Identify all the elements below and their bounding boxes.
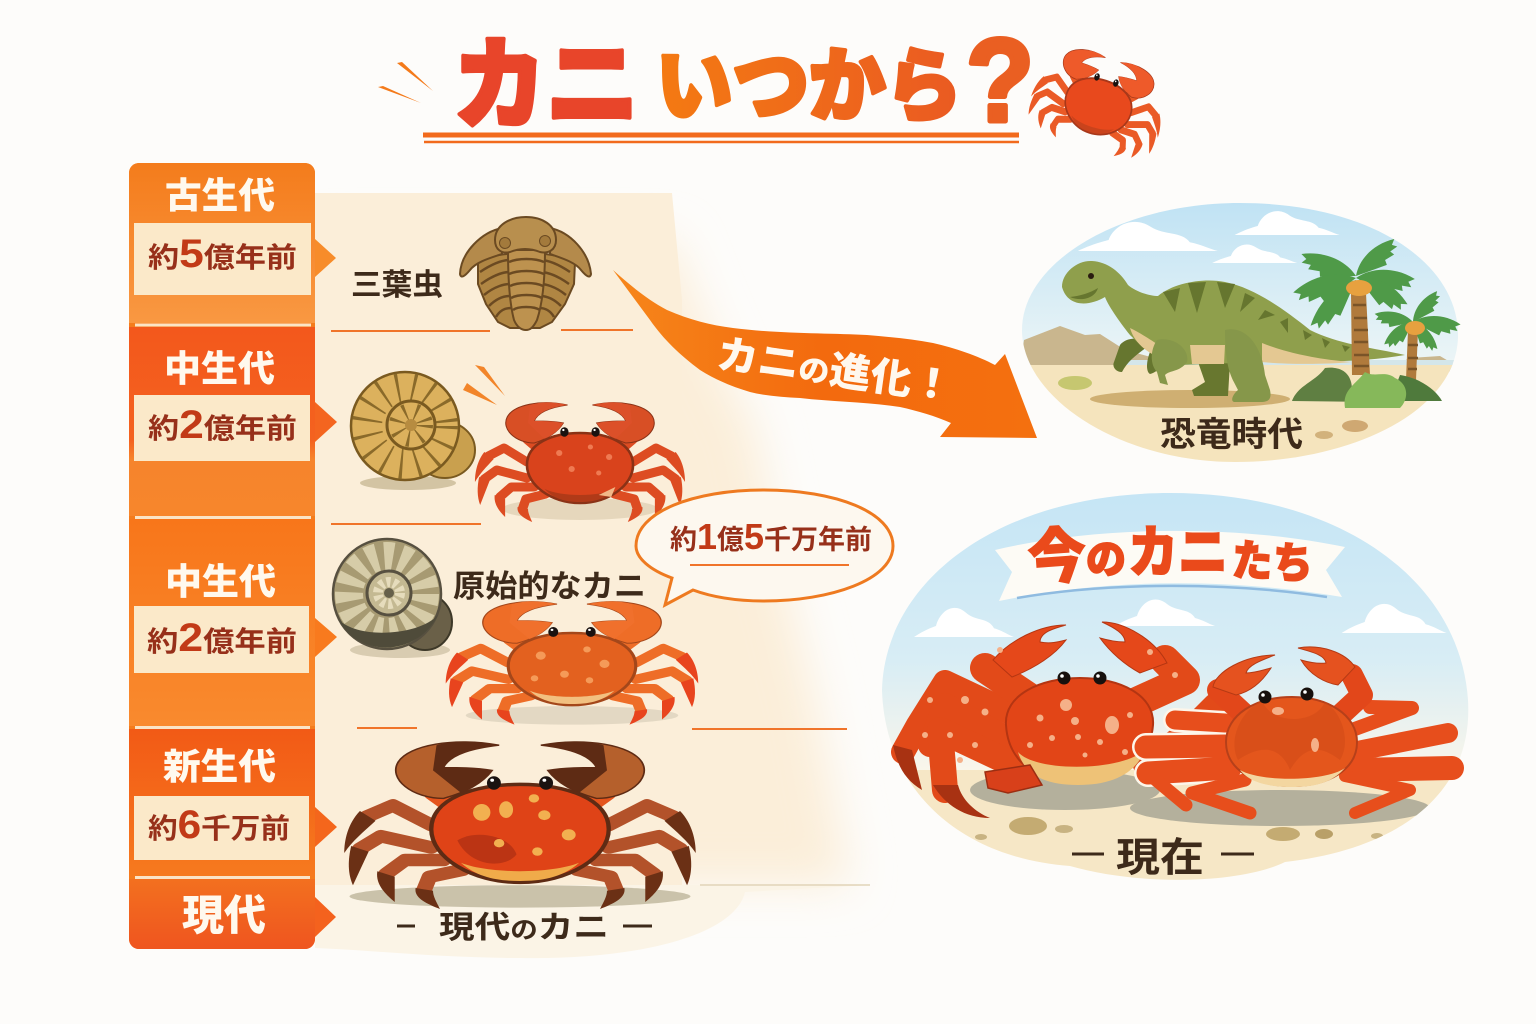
title accent strokes: [378, 62, 433, 103]
label: 恐竜時代: 恐竜時代: [1160, 407, 1303, 456]
era block: 中生代 (2): 約2億年前: [147, 616, 297, 660]
era block: 新生代: [129, 729, 337, 877]
label: 三葉虫: 三葉虫: [351, 269, 443, 302]
panel: modern crabs scene: [880, 490, 1475, 890]
timeline dividers: [331, 330, 847, 729]
icon: crab Cenozoic large: [344, 742, 696, 909]
icon: left modern crab: [893, 622, 1215, 818]
rocks and tuft: [1058, 376, 1368, 439]
era block: 古生代: 約5億年前: [148, 232, 297, 276]
title: ?: [966, 15, 1034, 147]
sky: [1020, 200, 1460, 370]
title: カニ: [453, 30, 639, 142]
right claw: [1298, 647, 1355, 685]
label: 原始的なカニ: 原始的なカニ: [453, 569, 646, 604]
era block: 新生代: 新生代: [163, 746, 276, 787]
label: 現在: 現在: [1116, 825, 1204, 883]
arrow: カニの進化: カニの進化！: [714, 333, 956, 409]
icon: crab primitive: [446, 601, 698, 725]
icon: crab early Mesozoic: [475, 402, 685, 522]
era block: 現代: [129, 879, 336, 949]
clouds: [914, 600, 1447, 637]
small palm: [1373, 288, 1461, 380]
rocks: [975, 817, 1383, 841]
icon: grey ammonite: [333, 539, 452, 658]
sand: [907, 770, 1449, 880]
title: いつから: [656, 42, 962, 131]
sea strip: [1120, 360, 1460, 370]
era block: 古生代: [129, 163, 336, 323]
ribbon: の: [1086, 538, 1126, 582]
era block: 中生代: [129, 327, 337, 516]
icon: burst marks: [463, 365, 505, 405]
clouds: [1078, 211, 1340, 263]
ribbon: [995, 521, 1345, 601]
ground shadow: [1090, 390, 1290, 408]
left claw: [1213, 655, 1275, 695]
panel: dinosaur scene: [1020, 200, 1461, 465]
ribbon: カニ: [1128, 521, 1228, 584]
icon: trilobite: [460, 217, 591, 330]
label: 現代のカニ: 現代 のカニ: [439, 910, 609, 945]
big palm: [1291, 234, 1415, 375]
ribbon: たち: [1231, 537, 1314, 589]
era block: 中生代: 約2億年前: [148, 403, 297, 447]
shadows: [970, 770, 1430, 826]
icon: right modern crab: [1146, 647, 1452, 813]
ribbon: 今: [1026, 522, 1088, 593]
dinosaur: [1062, 261, 1405, 402]
era block: 現代: 現代: [182, 892, 266, 939]
arrow: カニの進化: [613, 270, 1037, 438]
left claw: [993, 625, 1066, 677]
panel: era column: [129, 163, 337, 949]
icon: golden ammonite: [351, 372, 475, 490]
bushes: [1292, 368, 1442, 408]
era block: 新生代: 約6千万前: [148, 803, 290, 847]
callout: 約1億5千万年前: [636, 490, 893, 605]
icon: title crab: [1021, 37, 1177, 167]
era block: 古生代: 古生代: [165, 175, 275, 216]
right claw: [1100, 622, 1167, 673]
era block: 中生代: 中生代: [164, 348, 275, 389]
title: [378, 15, 1034, 147]
callout: 約1億5千万年前: 約1億5千万年前: [670, 516, 872, 557]
era block: 中生代 (2): [129, 519, 337, 726]
panel: timeline parchment: [315, 193, 870, 958]
era block: 中生代 (2): 中生代: [165, 561, 276, 602]
sky: [880, 490, 1475, 775]
sand: [1020, 365, 1460, 465]
hills: [1020, 326, 1460, 372]
